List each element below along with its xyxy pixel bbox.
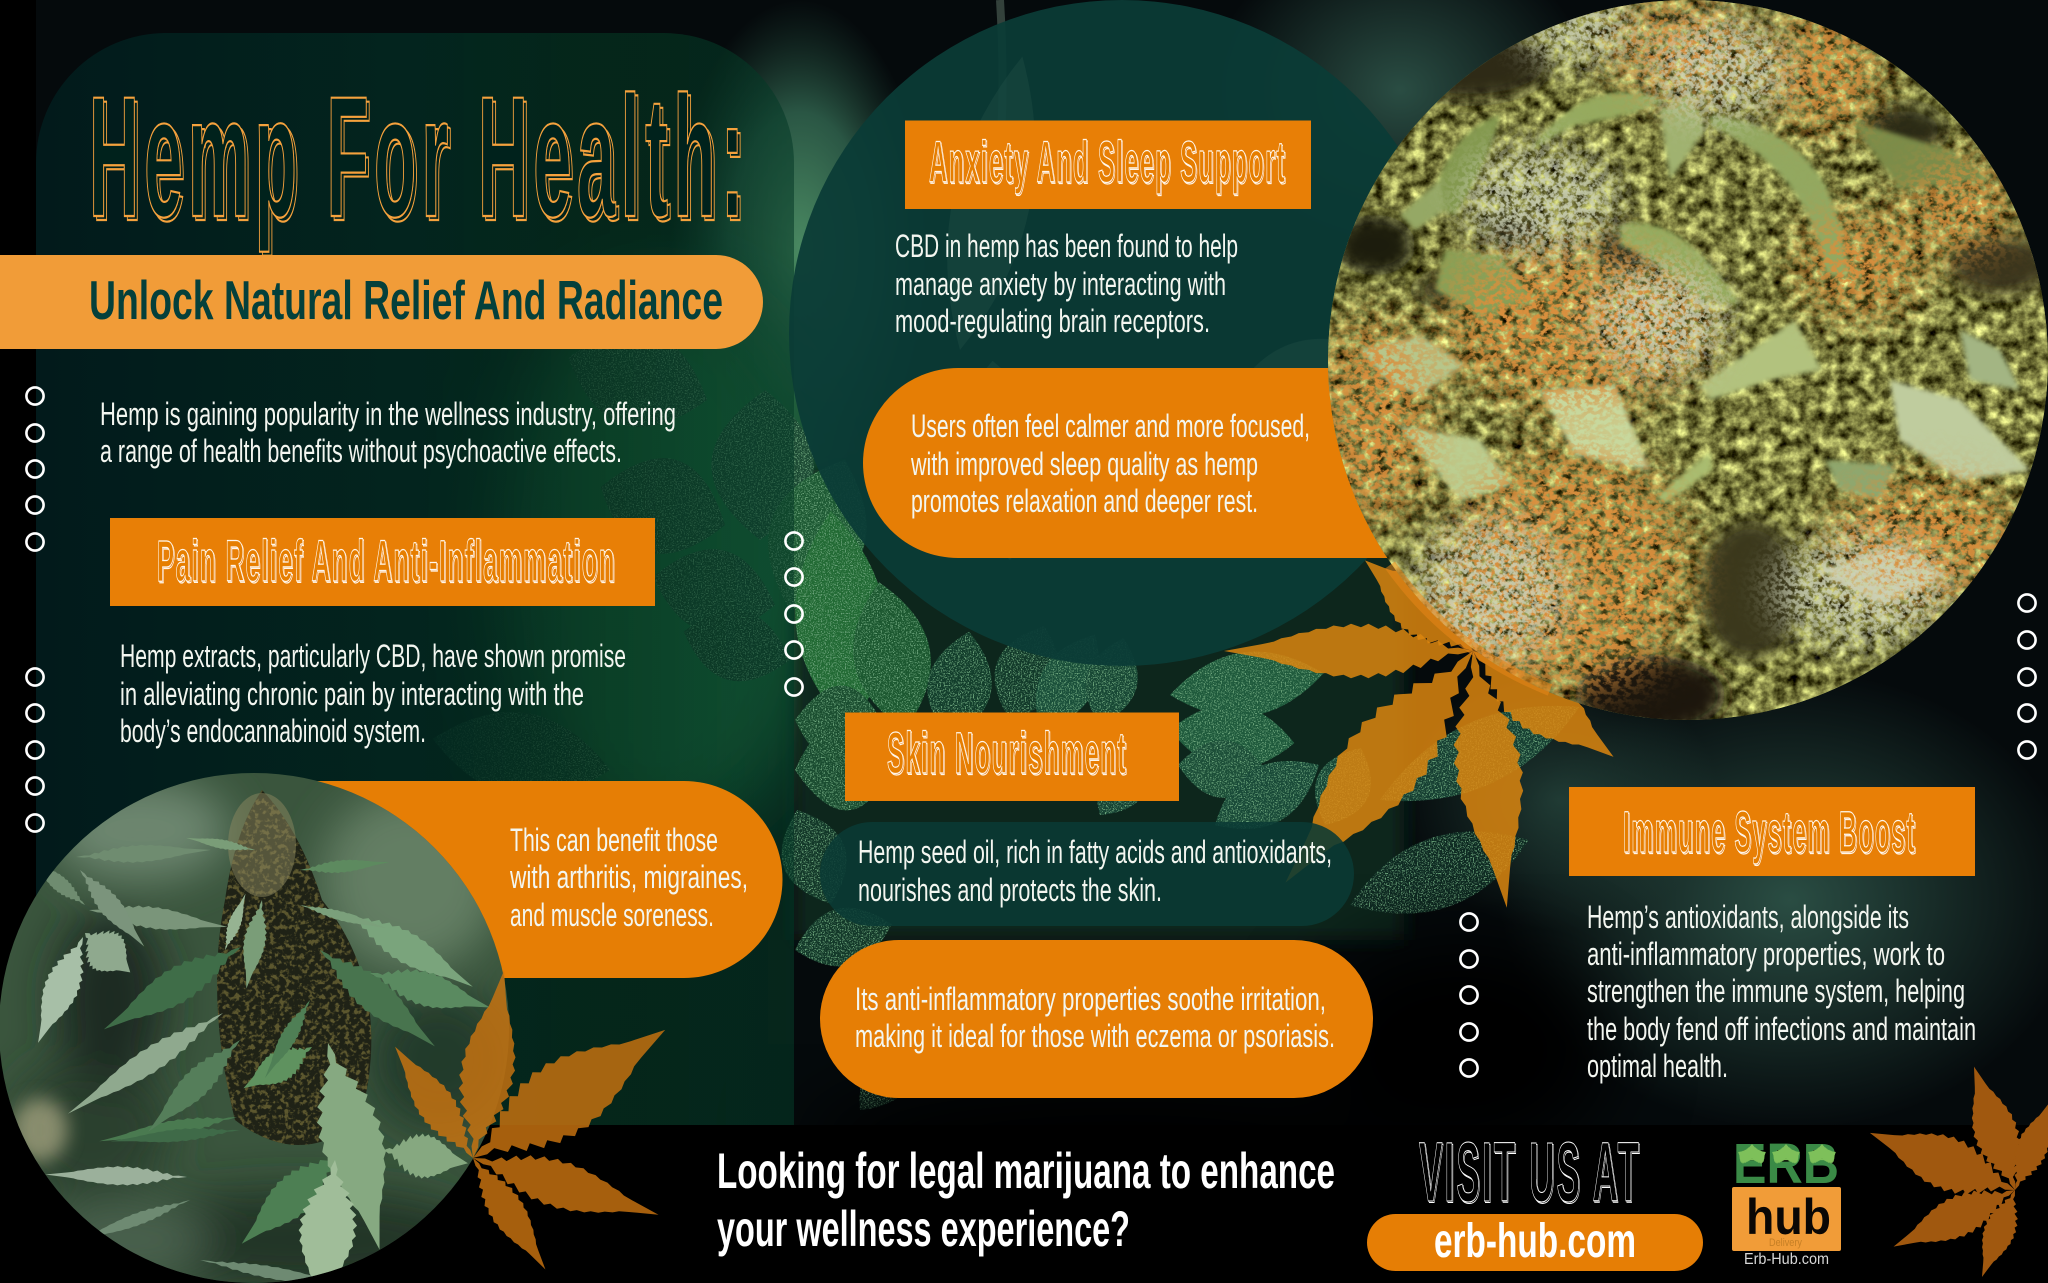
photo: hemp plant circle <box>0 770 510 1283</box>
callout: pain relief benefit: and muscle soreness. <box>510 897 714 933</box>
text: skin paragraph on dark pill: Hemp seed oil, rich in fatty acids and antioxidants, <box>858 834 1332 870</box>
intro text: Hemp is gaining popularity in the wellness industry, offering <box>100 396 676 432</box>
text: pain relief paragraph: body’s endocannabinoid system. <box>120 713 426 749</box>
subtitle banner <box>0 255 763 349</box>
text: skin paragraph on dark pill: nourishes and protects the skin. <box>858 872 1162 908</box>
bullet dots: left upper <box>26 387 44 551</box>
heading: Pain Relief And Anti-Inflammation <box>110 518 655 606</box>
heading: Anxiety And Sleep Support <box>905 120 1311 209</box>
website pill: erb-hub.com <box>1434 1215 1636 1268</box>
text: anxiety paragraph: manage anxiety by interacting with <box>895 266 1226 302</box>
bud <box>217 790 371 1145</box>
text: VISIT US AT <box>1419 1125 1641 1219</box>
photo: dried hemp bud circle <box>1320 0 2048 735</box>
logo: ERB hub: ERB <box>1733 1132 1839 1196</box>
dark gaps <box>1335 30 2048 735</box>
logo: ERB hub: Delivery <box>1769 1237 1802 1249</box>
text: immune paragraph <box>1587 899 1976 1084</box>
text: Hemp For Health: <box>89 61 749 253</box>
logo: ERB hub <box>1732 1132 1841 1268</box>
bullet dots: right <box>2018 594 2036 759</box>
logo: ERB hub: Erb-Hub.com <box>1744 1251 1829 1268</box>
callout: sleep benefit <box>863 368 1420 558</box>
frosted trichomes <box>1410 0 1950 660</box>
leaves <box>22 833 495 1283</box>
panel: left dark rounded panel <box>36 33 794 1125</box>
callout: pain relief benefit: This can benefit those <box>510 822 718 858</box>
heading: Immune System Boost <box>1569 787 1975 876</box>
text: immune paragraph: optimal health. <box>1587 1048 1728 1084</box>
callout: sleep benefit: Users often feel calmer and more focused, <box>911 408 1310 444</box>
pale leaves <box>1360 90 2030 605</box>
bullet dots: left lower <box>26 668 44 832</box>
intro text: a range of health benefits without psychoactive effects. <box>100 433 622 469</box>
icon: orange hemp leaf bottom right <box>1860 1060 2048 1283</box>
panel: central dark circle <box>789 0 1455 666</box>
text: skin paragraph on dark pill <box>820 822 1354 926</box>
text: anxiety paragraph: CBD in hemp has been found to help <box>895 228 1238 264</box>
icon: orange hemp leaf over plant photo <box>379 966 686 1279</box>
call to action text <box>717 1143 1335 1257</box>
callout: pain relief benefit <box>300 781 782 978</box>
subtitle banner: Unlock Natural Relief And Radiance <box>89 269 723 331</box>
callout: skin benefit: making it ideal for those with eczema or psoriasis. <box>855 1018 1335 1054</box>
text: Anxiety And Sleep Support <box>929 130 1286 195</box>
logo: ERB hub: hub <box>1746 1189 1831 1245</box>
icon: orange hemp leaf centre <box>1224 538 1633 912</box>
callout: skin benefit: Its anti-inflammatory properties soothe irritation, <box>855 981 1326 1017</box>
call to action text: Looking for legal marijuana to enhance <box>717 1143 1335 1199</box>
intro text <box>100 396 676 469</box>
bullet dots: lower right <box>1460 913 1478 1077</box>
text: anxiety paragraph <box>895 228 1238 339</box>
text: pain relief paragraph: Hemp extracts, particularly CBD, have shown promise <box>120 638 626 674</box>
black footer band <box>0 1125 2048 1283</box>
text: pain relief paragraph <box>120 638 626 749</box>
callout: skin benefit <box>820 940 1373 1098</box>
call to action text: your wellness experience? <box>717 1201 1130 1257</box>
text: pain relief paragraph: in alleviating chronic pain by interacting with the <box>120 676 584 712</box>
orange strands <box>1320 3 2020 695</box>
heading: Skin Nourishment: Skin Nourishment <box>887 721 1127 786</box>
text: Pain Relief And Anti-Inflammation <box>157 529 616 594</box>
callout: sleep benefit: promotes relaxation and deeper rest. <box>911 483 1258 519</box>
heading: Skin Nourishment <box>845 712 1179 801</box>
text: anxiety paragraph: mood-regulating brain receptors. <box>895 303 1210 339</box>
bullet dots: centre <box>785 532 803 696</box>
callout: pain relief benefit: with arthritis, migraines, <box>509 859 748 895</box>
decorative orange tint on bud photo edge <box>1390 565 1550 690</box>
callout: sleep benefit: with improved sleep quality as hemp <box>910 446 1258 482</box>
